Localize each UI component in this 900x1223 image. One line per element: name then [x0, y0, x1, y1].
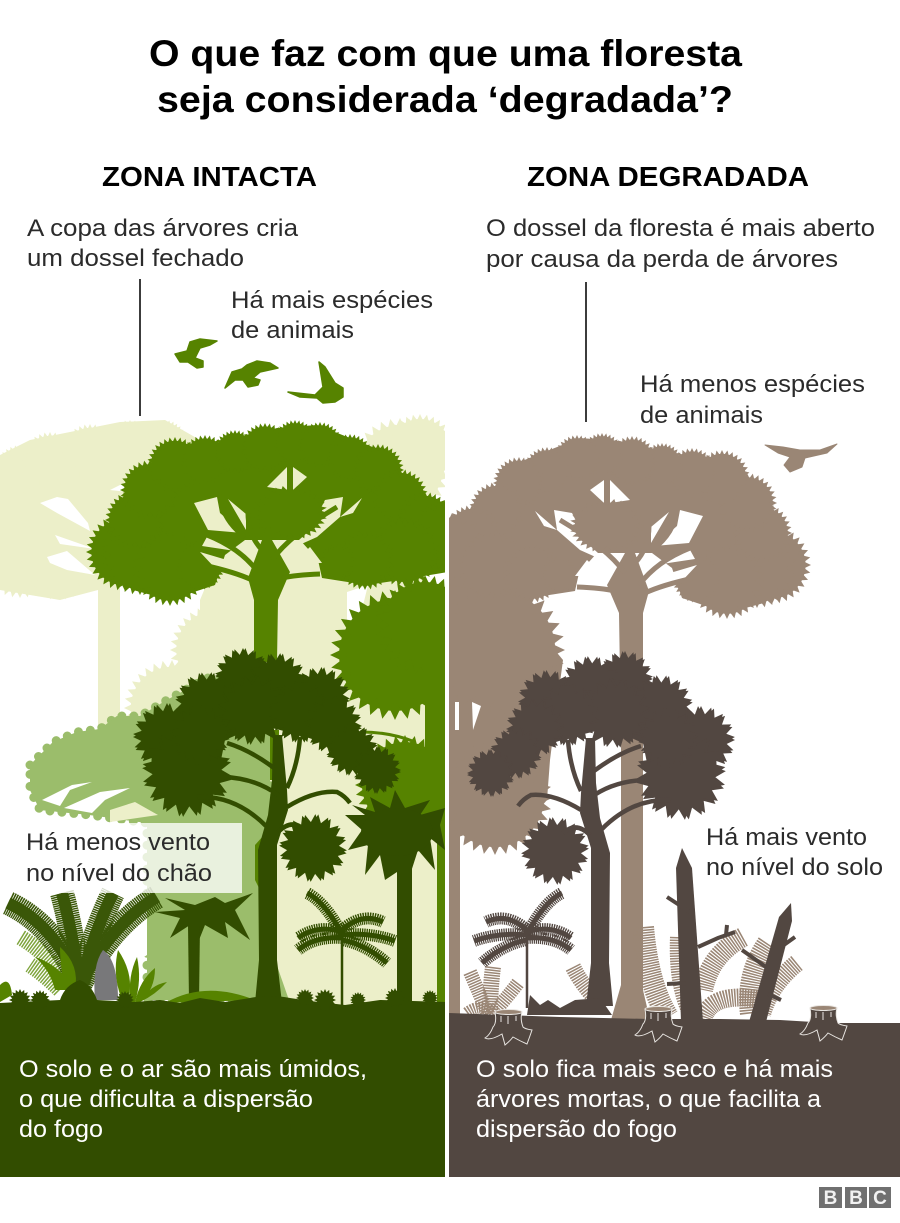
- text: humid soil: do fogo: [19, 1116, 103, 1143]
- dark brown foreground tree: [465, 649, 738, 1006]
- heading: intact zone: ZONA INTACTA: [102, 161, 317, 192]
- tree stump 3: [800, 1006, 847, 1041]
- BBC logo: C: [873, 1188, 887, 1209]
- text: more animal species: de animais: [231, 317, 354, 344]
- text: open canopy: [486, 215, 875, 273]
- right mid-green tree: [330, 576, 445, 1002]
- icon: brown bird: [765, 444, 837, 472]
- title: O que faz com que uma floresta: [149, 33, 742, 74]
- icon: bird 2: [225, 361, 278, 388]
- dead trunk left: [667, 848, 735, 1022]
- text: more animal species: Há mais espécies: [231, 287, 433, 314]
- mid-green trunk segments: [255, 730, 279, 890]
- text: dry soil: O solo fica mais seco e há mais: [476, 1056, 833, 1083]
- pointer line right: [585, 282, 587, 422]
- BBC logo: B: [849, 1188, 863, 1209]
- text: fewer animal species: Há menos espécies: [640, 371, 865, 398]
- dead trunk right: [742, 903, 795, 1022]
- text: fewer animal species: de animais: [640, 402, 763, 429]
- text: more wind: Há mais vento: [706, 824, 867, 851]
- pale back tree: [0, 415, 200, 735]
- brown palm fronds: [467, 927, 797, 1020]
- dark green foreground tree: [130, 646, 403, 1003]
- icon: bird 3: [288, 362, 343, 403]
- BBC logo: B: [824, 1188, 837, 1209]
- text: more wind: [706, 824, 883, 881]
- main canopy tree: [86, 420, 445, 662]
- brown ground: [449, 1013, 900, 1177]
- text: closed canopy: [27, 215, 299, 272]
- panel: degraded zone forest: [411, 429, 900, 1177]
- tree stump 1: [485, 1010, 532, 1045]
- text: less wind: no nível do chão: [26, 860, 212, 887]
- text: closed canopy: um dossel fechado: [27, 245, 244, 272]
- pale middle forest layer: [116, 408, 462, 1005]
- brown trunk: [612, 738, 647, 1019]
- undergrowth plants: [0, 947, 255, 1003]
- big fern: [8, 893, 157, 990]
- dark undergrowth: [527, 995, 612, 1015]
- brown back tree: [449, 585, 565, 1014]
- text: dry soil: árvores mortas, o que facilita a: [476, 1086, 822, 1113]
- pointer line left: [139, 279, 141, 416]
- light green tree: [30, 678, 290, 1003]
- text: open canopy: por causa da perda de árvores: [486, 246, 838, 273]
- text: less wind: [26, 829, 212, 887]
- tree fern: [298, 893, 395, 1008]
- translucent label box: [14, 823, 242, 893]
- BBC logo: [819, 1187, 891, 1209]
- ground: [0, 980, 445, 1177]
- text: humid soil: O solo e o ar são mais úmidos,: [19, 1056, 367, 1083]
- title: seja considerada ‘degradada’?: [157, 79, 733, 120]
- icon: bird 1: [175, 339, 217, 368]
- brown tree fern: [474, 893, 571, 1008]
- text: more animal species: [231, 287, 433, 344]
- tree stump 2: [635, 1006, 682, 1042]
- right palm: [345, 790, 445, 1005]
- title: [149, 33, 742, 120]
- text: fewer animal species: [640, 371, 865, 429]
- text: more wind: no nível do solo: [706, 854, 883, 881]
- text: less wind: Há menos vento: [26, 829, 210, 856]
- panel: intact zone forest: [0, 408, 486, 1177]
- text: closed canopy: A copa das árvores cria: [27, 215, 299, 242]
- text: dry soil: [476, 1056, 833, 1143]
- brown canopy tree: [449, 433, 811, 660]
- middle palm: [155, 893, 253, 1002]
- text: humid soil: o que dificulta a dispersão: [19, 1086, 313, 1113]
- text: humid soil: [19, 1056, 367, 1143]
- text: open canopy: O dossel da floresta é mais aberto: [486, 215, 875, 242]
- heading: degraded zone: ZONA DEGRADADA: [527, 161, 809, 192]
- text: dry soil: dispersão do fogo: [476, 1116, 677, 1143]
